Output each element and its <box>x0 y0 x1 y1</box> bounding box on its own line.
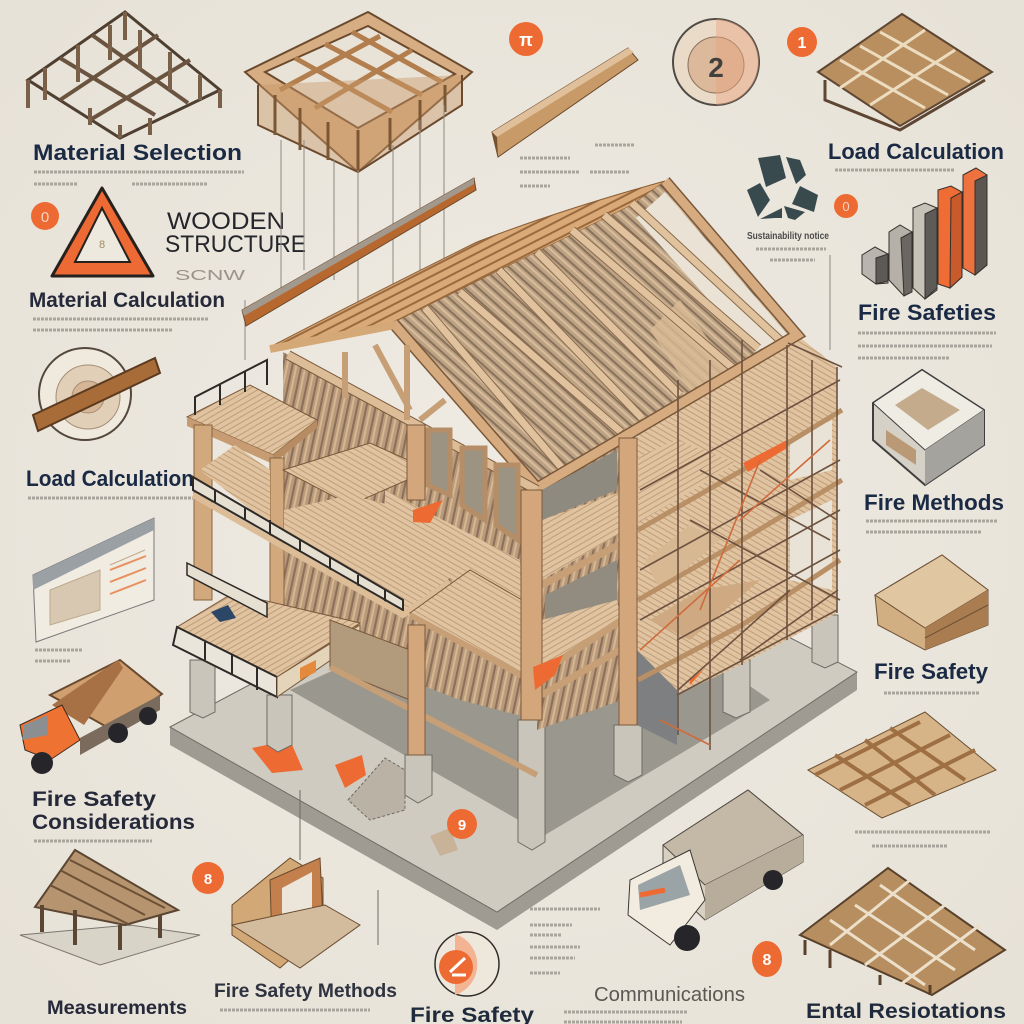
upper inner floor <box>283 443 430 505</box>
middle dark band upper <box>542 450 617 520</box>
icon: top-right timber deck <box>818 14 992 130</box>
interior: right section <box>637 335 837 700</box>
orange badge 4 <box>834 194 858 218</box>
stairs <box>348 758 405 820</box>
icon: open book <box>33 518 154 642</box>
text line <box>220 1008 370 1012</box>
orange badge 3 <box>31 202 59 230</box>
pale corner of roof <box>636 192 788 352</box>
icon: bottom-right timber frame <box>800 868 1005 995</box>
main structure <box>170 181 857 930</box>
orange badge 2 <box>787 27 817 57</box>
icon: warning triangle <box>52 188 153 276</box>
heading: Communications: Communications <box>594 984 745 1006</box>
roof outer frame <box>393 181 797 488</box>
text: recycling caption <box>747 231 829 260</box>
heading: Wooden Structure: STRUCTURE <box>165 231 306 258</box>
open roof plane <box>393 181 797 488</box>
heading: Wooden Structure: WOODEN <box>167 208 285 235</box>
orange badge 2: 1 <box>798 35 807 52</box>
text lines <box>564 1012 688 1022</box>
heading: Material Calculation: Material Calculation <box>29 289 225 312</box>
icon: lumber stack <box>875 555 988 650</box>
heading: Fire Methods: Fire Methods <box>864 490 1004 515</box>
orange badge 5 <box>752 941 782 977</box>
text line <box>884 692 979 694</box>
orange tools on slab <box>252 740 477 856</box>
heading: Load Calculation left: Load Calculation <box>26 466 194 491</box>
roof outer frame light <box>393 181 797 488</box>
eave <box>270 325 395 349</box>
slab <box>170 520 857 930</box>
middle floor lower <box>542 600 622 665</box>
icon: orange truck <box>20 660 162 774</box>
leader line <box>300 790 378 945</box>
interior: middle section <box>537 440 622 730</box>
icon: dial 2 <box>673 19 759 105</box>
heading: Measurements: Measurements <box>47 998 187 1019</box>
icon: top timber floor frame <box>245 12 472 172</box>
text lines <box>34 172 244 184</box>
heading: Fire Safety (right): Fire Safety <box>874 659 989 684</box>
rafters shadow <box>425 203 780 468</box>
heading: Fire Safety right: Fire Safeties <box>858 300 996 325</box>
middle dark band lower <box>545 560 617 620</box>
concrete columns <box>190 615 838 850</box>
heading: Fire Safety Considerations <box>32 788 195 834</box>
orange badge 3: 0 <box>41 209 49 226</box>
scaffold <box>640 340 842 750</box>
wooden main posts <box>407 425 637 755</box>
heading: Ental Resiotations: Ental Resiotations <box>806 1000 1006 1023</box>
icon: top-left timber grid frame <box>28 12 220 138</box>
lower left floor interior <box>330 620 410 700</box>
heading: Fire Safety Considerations: Considerations <box>32 811 195 834</box>
text lines <box>33 319 209 330</box>
pale gaps in scaffold <box>790 420 832 590</box>
right floors <box>638 440 760 640</box>
rafters <box>425 203 780 468</box>
icon: timber cabin <box>20 850 200 965</box>
orange tools on slab: 9 <box>458 817 466 834</box>
second floor beam <box>193 495 450 615</box>
pale patch in roof <box>650 300 730 390</box>
text lines <box>35 650 83 661</box>
text lines <box>530 909 600 973</box>
heading: Fire Safety Considerations: Fire Safety <box>32 788 156 811</box>
shadow on slab <box>290 610 770 835</box>
orange badge 6: 8 <box>204 871 212 888</box>
heading: Wooden Structure <box>165 208 306 258</box>
second floor surface <box>200 445 537 640</box>
dark areas in lower right <box>637 650 677 745</box>
orange badge 1: π <box>519 30 533 50</box>
icon: cargo truck <box>628 790 803 951</box>
text: recycling caption: Sustainability notice <box>747 231 829 242</box>
second floor railing <box>193 477 403 610</box>
text line <box>835 168 955 172</box>
diagonal timber beam <box>242 178 476 326</box>
text: beam caption <box>520 145 635 186</box>
icon: concrete box <box>873 370 984 485</box>
text lines <box>34 840 152 842</box>
icon: dial 2: 2 <box>708 52 724 83</box>
icon: timber beam <box>492 48 638 157</box>
text lines <box>866 521 998 532</box>
icon: wood frame section <box>232 858 360 968</box>
small text smudge: SCNW <box>175 267 246 284</box>
middle floor upper <box>542 493 622 580</box>
heading: Material Selection: Material Selection <box>33 140 242 165</box>
icon: floor joists <box>808 712 996 818</box>
heading: Load Calculation (right): Load Calculation <box>828 139 1004 164</box>
text line <box>28 496 193 500</box>
orange highlights <box>533 440 787 690</box>
solid roof plane <box>270 181 665 347</box>
text lines <box>858 333 996 358</box>
right beams <box>638 410 842 680</box>
gable truss <box>288 345 537 490</box>
orange badge 6 <box>192 862 224 894</box>
icon: flame gauge <box>435 932 499 996</box>
floor 3 beam <box>330 615 537 775</box>
left posts <box>194 425 284 620</box>
icon: warning triangle: 8 <box>99 239 105 251</box>
lower rail behind <box>187 563 267 617</box>
text lines <box>855 832 990 846</box>
floor 3 front left <box>410 570 522 673</box>
heading: Fire Safety Methods: Fire Safety Methods <box>214 981 397 1002</box>
upper balcony <box>187 360 317 464</box>
orange badge 4: 0 <box>842 199 850 214</box>
middle beams <box>542 535 637 695</box>
orange badge 1 <box>509 22 543 56</box>
lower left floor <box>173 593 360 697</box>
icon: dial with timber <box>33 348 160 440</box>
leader lines <box>245 105 830 360</box>
orange badge 5: 8 <box>763 952 772 969</box>
interior: left section <box>283 352 537 720</box>
roof <box>270 181 797 488</box>
orange strip <box>413 500 443 523</box>
icon: recycling <box>747 155 818 220</box>
floor surface mid-left <box>385 490 520 590</box>
bar chart <box>862 168 987 299</box>
windows of upper level <box>428 430 518 540</box>
